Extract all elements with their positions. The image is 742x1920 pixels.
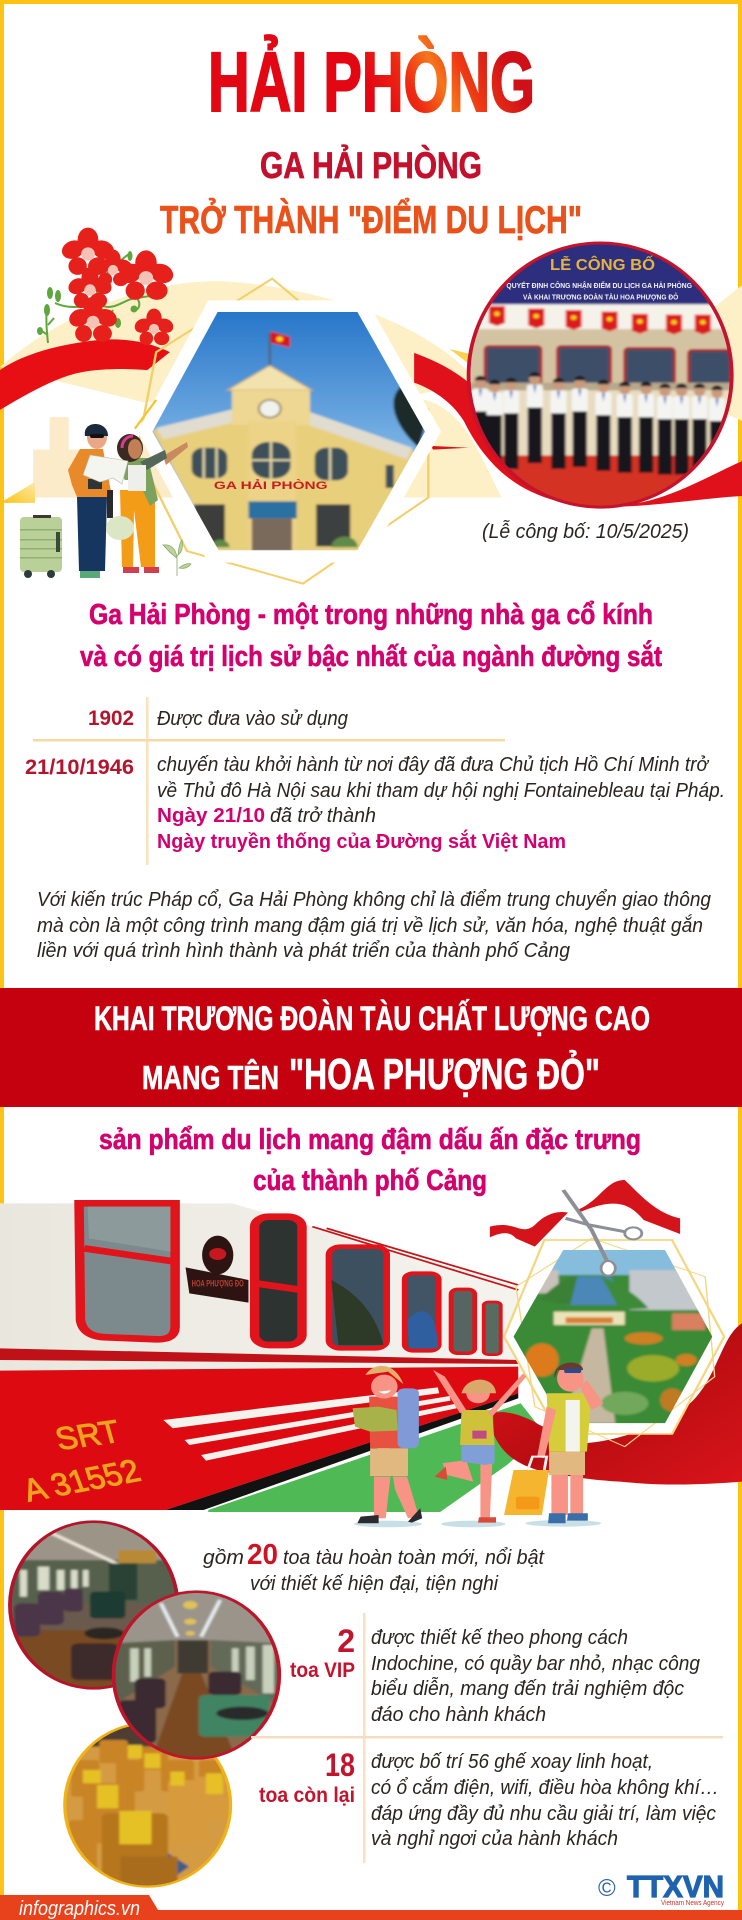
- ribbon and scissors: [490, 1180, 680, 1276]
- VIP coach description: Indochine, có quầy bar nhỏ, nhạc công: [371, 1652, 701, 1675]
- red banner: MANG TÊN: [142, 1059, 279, 1096]
- ghost building: [33, 417, 102, 498]
- white side stripes: [163, 1387, 457, 1461]
- subtitle line 1: GA HẢI PHÒNG: [260, 144, 482, 186]
- plant: [163, 540, 191, 576]
- hero illustration: ribbon, photos: [0, 241, 742, 584]
- VIP coach description: biểu diễn, mang đến trải nghiệm độc: [371, 1677, 685, 1700]
- red drape ribbon: [493, 1323, 742, 1485]
- entry 21/10/1946: chuyến tàu khởi hành từ nơi đây đã đưa Chủ tịch Hồ Chí Minh trở: [157, 753, 709, 776]
- photo: ceremony circle: VÀ KHAI TRƯƠNG ĐOÀN TÀU HOA PHƯỢNG ĐỎ: [523, 291, 678, 301]
- rolled bag: [106, 516, 134, 540]
- heading: oldest station: [80, 599, 662, 673]
- cream swooshes: [0, 281, 742, 498]
- paragraph: French architecture: [37, 888, 712, 962]
- paragraph: French architecture: Với kiến trúc Pháp cổ, Ga Hải Phòng không chỉ là điểm trung chuyển giao thông: [37, 888, 712, 911]
- title: HẢI PHÒNG: [208, 35, 535, 129]
- intro: 20 coaches: 20: [247, 1539, 278, 1571]
- man: [68, 424, 113, 578]
- other coaches label: toa còn lại: [259, 1784, 355, 1807]
- red banner: [0, 988, 742, 1107]
- city aerial photo: [511, 1248, 715, 1425]
- tourist couple with suitcase: [20, 424, 191, 578]
- intro: 20 coaches: gồm: [203, 1546, 244, 1569]
- coach number: [18, 1414, 145, 1509]
- VIP coach label: 2: [337, 1623, 355, 1659]
- TTXVN logo: Vietnam News Agency: [661, 1900, 724, 1907]
- photo: Ga Hải Phòng station: GA HẢI PHÒNG: [214, 478, 328, 492]
- date 21/10/1946: 21/10/1946: [25, 756, 134, 779]
- date caption: (Lễ công bố: 10/5/2025): [482, 520, 689, 543]
- white hexagon frame: [137, 300, 441, 563]
- VIP coach description: đáo cho hành khách: [371, 1703, 546, 1726]
- train scene: [0, 1180, 742, 1527]
- tourist waving: [433, 1370, 526, 1523]
- VIP coach label: toa VIP: [290, 1659, 355, 1682]
- entry 21/10/1946: Ngày 21/10: [157, 804, 265, 827]
- coach table dividers: [251, 1613, 723, 1863]
- heading: tourism product: sản phẩm du lịch mang đậm dấu ấn đặc trưng: [99, 1124, 641, 1156]
- history timeline table: [25, 697, 725, 865]
- gold frame accent: [135, 400, 156, 429]
- year 1902: 1902: [88, 707, 134, 730]
- other coaches description: có ổ cắm điện, wifi, điều hòa không khí…: [371, 1776, 719, 1799]
- entry 21/10/1946: Ngày truyền thống của Đường sắt Việt Nam: [157, 829, 566, 853]
- red ribbon left: [0, 339, 170, 410]
- TTXVN logo: TTXVN: [627, 1869, 724, 1904]
- intro: 20 coaches: toa tàu hoàn toàn mới, nổi bật: [283, 1546, 545, 1569]
- gold-framed seat carriage photo: [62, 1720, 237, 1890]
- woman: [117, 434, 188, 573]
- paragraph: French architecture: mà còn là một công trình mang đậm giá trị về lịch sử, văn hóa, nghệ thuật gắn: [37, 914, 703, 937]
- gold and white hexagon frame: [504, 1238, 724, 1447]
- coach number: SRT: [52, 1414, 124, 1457]
- lounge carriage photo 1: [9, 1520, 180, 1690]
- photo: ceremony circle: LỄ CÔNG BỐ: [550, 256, 655, 273]
- VIP coach description: [371, 1626, 701, 1726]
- other coaches label: 18: [325, 1747, 355, 1783]
- entry 21/10/1946: đã trở thành: [270, 804, 376, 827]
- lounge carriage photo 2: [111, 1592, 282, 1762]
- train windows: [79, 1203, 501, 1355]
- other coaches description: [371, 1750, 719, 1850]
- entry 1902: Được đưa vào sử dụng: [157, 707, 349, 730]
- hoa phuong do logo: [186, 1236, 248, 1303]
- VIP coach description: được thiết kế theo phong cách: [371, 1626, 628, 1649]
- red ribbon right: [414, 353, 742, 507]
- red train photo: [0, 1203, 544, 1512]
- tourist with yellow suitcase: [504, 1363, 603, 1523]
- footer bar: infographics.vn: [19, 1898, 140, 1920]
- VIP coach label: [290, 1623, 355, 1682]
- photo: Ga Hải Phòng station: [152, 312, 425, 550]
- other coaches description: được bố trí 56 ghế xoay linh hoạt,: [371, 1750, 653, 1773]
- intro: 20 coaches: [203, 1539, 545, 1595]
- ground shadows: [354, 1520, 601, 1527]
- TTXVN logo: ©: [598, 1875, 616, 1902]
- coach number: A 31552: [18, 1453, 145, 1509]
- subtitle line 2: TRỞ THÀNH "ĐIỂM DU LỊCH": [160, 197, 582, 242]
- heading: oldest station: Ga Hải Phòng - một trong những nhà ga cổ kính: [89, 599, 653, 631]
- paragraph: French architecture: liền với quá trình hình thành và phát triển của thành phố Cảng: [37, 939, 571, 962]
- suitcase: [20, 515, 62, 578]
- yellow corner wedge: [0, 482, 35, 503]
- other coaches label: [259, 1747, 355, 1807]
- intro: 20 coaches: với thiết kế hiện đại, tiện nghi: [250, 1572, 499, 1595]
- tourist with map: [353, 1366, 422, 1523]
- footer bar: [0, 1895, 742, 1920]
- red banner: "HOA PHƯỢNG ĐỎ": [289, 1048, 600, 1099]
- heading: tourism product: của thành phố Cảng: [253, 1165, 487, 1197]
- TTXVN logo: [598, 1869, 724, 1907]
- red train photo: HOA PHƯỢNG ĐỎ: [192, 1279, 244, 1289]
- other coaches description: đáp ứng đầy đủ nhu cầu giải trí, làm việc: [371, 1802, 717, 1825]
- flame tree flowers: [37, 228, 177, 345]
- other coaches description: và nghỉ ngơi của hành khách: [371, 1827, 618, 1850]
- heading: tourism product: [99, 1124, 641, 1197]
- interior photos: [9, 1520, 282, 1890]
- entry 21/10/1946: [157, 753, 725, 853]
- map: [83, 455, 128, 484]
- gold outline hexagons: [137, 279, 428, 584]
- photo: ceremony circle: [464, 241, 738, 509]
